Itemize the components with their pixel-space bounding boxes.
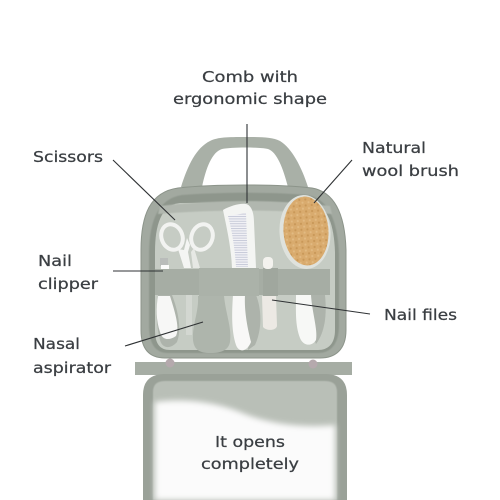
- clipper handle shadow: [157, 295, 179, 347]
- brush bristles: [281, 195, 331, 267]
- label: natural wool brush: wool brush: [362, 162, 459, 180]
- label: scissors: Scissors: [33, 148, 103, 166]
- bag: lower opened section: [135, 358, 352, 500]
- label: nail clipper: Nail: [38, 252, 72, 270]
- label: natural wool brush: Natural: [362, 139, 426, 157]
- label: comb: [173, 68, 327, 108]
- line: nail files: [272, 300, 370, 314]
- lower shell: [143, 374, 347, 500]
- comb handle shadow: [240, 295, 260, 350]
- bag outer shell: [141, 185, 346, 358]
- comb head: [223, 204, 256, 268]
- clipper body: [161, 265, 169, 296]
- line: nasal aspirator: [125, 322, 203, 346]
- elastic strap: [155, 268, 330, 296]
- brush handle shadow: [311, 295, 326, 344]
- bag lining: [155, 203, 335, 350]
- comb teeth: [228, 213, 248, 267]
- label: it opens completely: It opens: [215, 433, 285, 451]
- label: comb: Comb with: [202, 68, 298, 86]
- lower lining: [153, 381, 337, 500]
- clipper metal top: [160, 258, 168, 266]
- comb handle: [232, 295, 251, 350]
- line: comb: [246, 124, 248, 203]
- file lower part: [262, 296, 277, 330]
- label: nail files: Nail files: [384, 306, 457, 324]
- lining top fold: [158, 201, 332, 214]
- label: nail clipper: [38, 252, 99, 293]
- nail clipper: [157, 258, 179, 347]
- label: comb: ergonomic shape: [173, 90, 327, 108]
- label: it opens completely: completely: [201, 455, 299, 473]
- label: natural wool brush: [362, 139, 459, 180]
- line: nail clipper: [113, 270, 163, 272]
- pointer lines: [113, 124, 370, 346]
- bag handle: [181, 137, 308, 187]
- label: nasal aspirator: aspirator: [33, 359, 112, 377]
- scissors lower blade: [186, 295, 192, 335]
- label: nasal aspirator: [33, 335, 112, 377]
- label: nail clipper: clipper: [38, 275, 99, 293]
- hinge band: [135, 362, 352, 375]
- label: nasal aspirator: Nasal: [33, 335, 80, 353]
- label: it opens completely: [201, 433, 299, 473]
- brush: [277, 193, 333, 345]
- scissors shanks: [178, 238, 191, 268]
- white mesh pocket: [155, 400, 335, 500]
- nail file: [262, 257, 277, 330]
- comb: [223, 204, 260, 350]
- brush head: [277, 193, 333, 271]
- zip pulls: [166, 358, 174, 368]
- bag: upper section with tools: [141, 137, 346, 358]
- clipper handle: [157, 296, 177, 339]
- scissors: [158, 221, 216, 335]
- nasal aspirator: [193, 296, 230, 353]
- inner zip track: [149, 193, 339, 353]
- line: scissors: [113, 160, 175, 220]
- brush handle: [296, 295, 316, 345]
- scissors loops: [158, 221, 186, 253]
- file upper tip: [263, 257, 273, 269]
- line: wool brush: [314, 160, 352, 203]
